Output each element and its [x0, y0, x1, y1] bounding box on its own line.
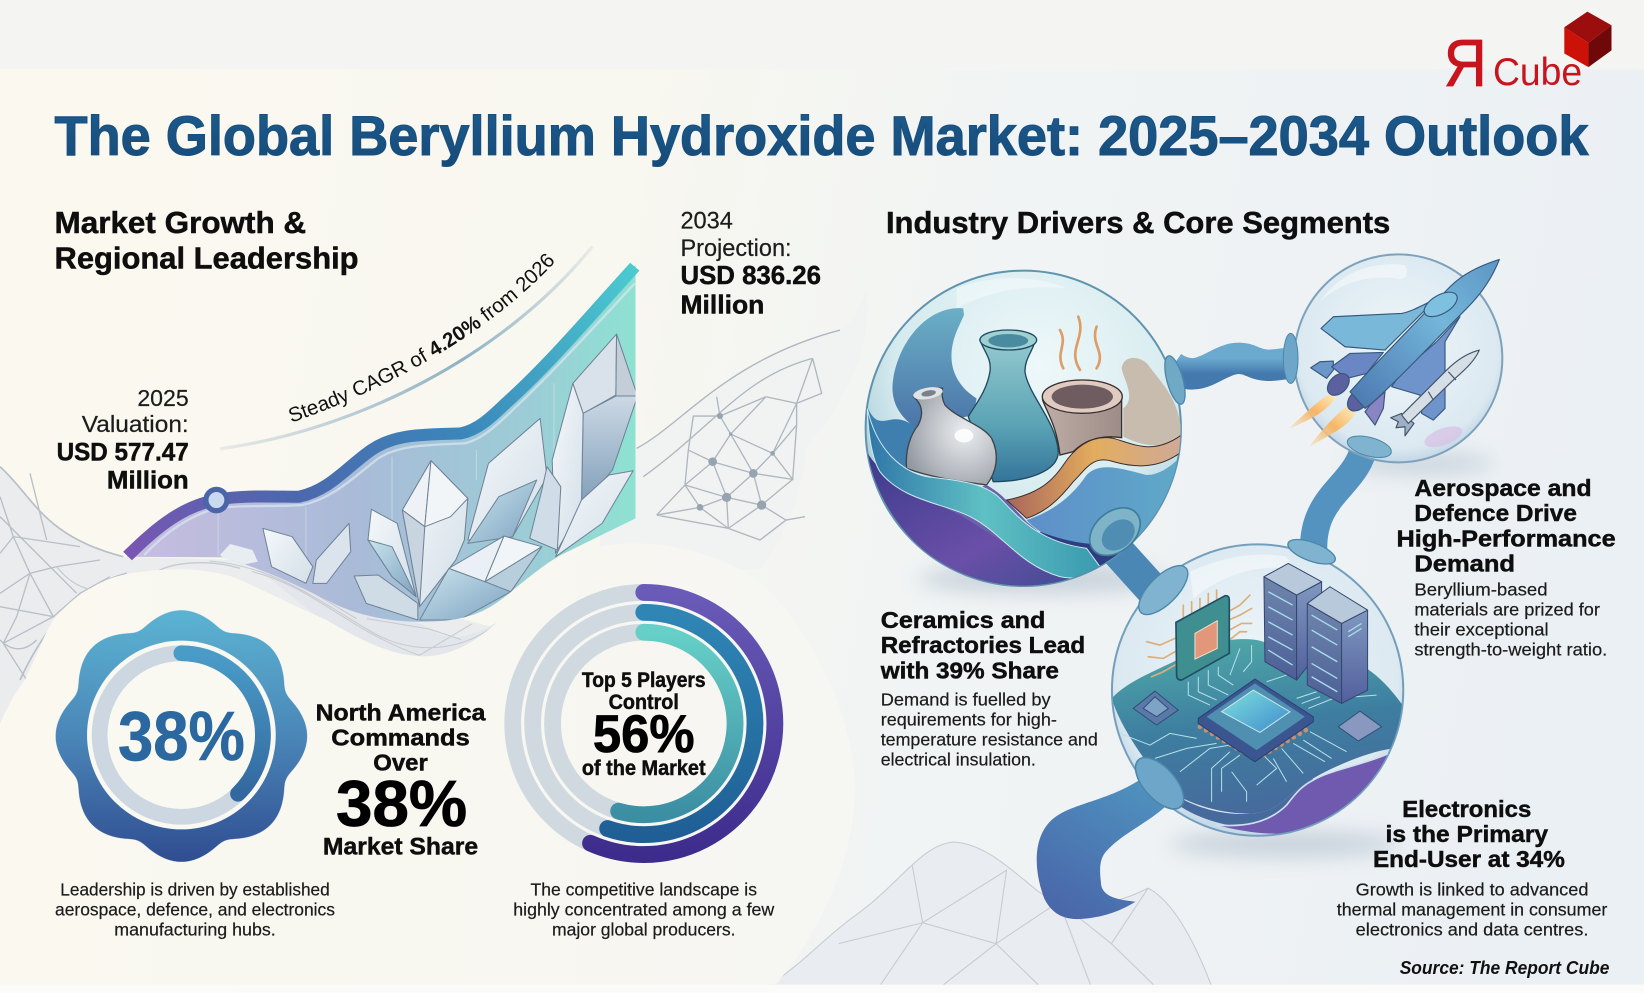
2025 marker: [203, 487, 230, 513]
2025 valuation label: 2025: [137, 385, 189, 411]
2025 valuation label: [57, 385, 189, 495]
north america description: Leadership is driven by established: [60, 879, 330, 899]
text: ceramics: with 39% Share: [880, 657, 1059, 683]
text: electronics: electronics and data centres.: [1356, 919, 1588, 939]
line chart with crystals: [127, 265, 638, 622]
sphere shadows: [917, 454, 1494, 857]
back swoosh: [892, 308, 977, 428]
north america stat: Market Share: [323, 834, 478, 861]
text: ceramics: electrical insulation.: [881, 749, 1036, 769]
text: aerospace: their exceptional: [1414, 619, 1549, 639]
2025 valuation label: Valuation:: [82, 411, 189, 437]
chip: copper: [1176, 596, 1229, 680]
2025 valuation label: USD 577.47: [57, 438, 189, 466]
ring chart: top 5 players: 56%: [593, 706, 695, 764]
sphere: aerospace: [1283, 254, 1502, 462]
text: aerospace: Beryllium-based: [1414, 580, 1548, 600]
text: aerospace: High-Performance: [1397, 525, 1616, 551]
sphere: ceramics: [866, 271, 1189, 587]
flames: [1289, 392, 1355, 447]
text: aerospace: Demand: [1414, 550, 1515, 576]
title: The Global Beryllium Hydroxide Market: 2025–2034 Outlook: [55, 105, 1589, 167]
gold legs: [1147, 590, 1252, 677]
mesh wave right: [600, 290, 867, 570]
pipe flange: [1080, 354, 1189, 565]
tube: [1042, 380, 1122, 455]
text: aerospace: strength-to-weight ratio.: [1414, 639, 1607, 659]
source note: Source: The Report Cube: [1400, 957, 1609, 978]
heat swirls: [1060, 317, 1100, 370]
north america description: aerospace, defence, and electronics: [55, 899, 335, 919]
circuit board: [1112, 639, 1405, 814]
tail pipe: [1037, 749, 1192, 919]
north america stat: North America: [316, 699, 486, 725]
missile: [1391, 350, 1479, 436]
servers: [1264, 563, 1368, 703]
ring chart: top 5 players: [513, 592, 775, 855]
text: ceramics: Refractories Lead: [881, 632, 1085, 658]
north america description: [55, 879, 335, 939]
text: electronics: [1337, 796, 1608, 939]
logo: [1444, 12, 1611, 101]
text: electronics: Electronics: [1402, 796, 1531, 822]
text: aerospace: [1397, 475, 1616, 659]
text: electronics: thermal management in consumer: [1337, 899, 1608, 919]
heading: market growth: [55, 206, 359, 275]
heading: industry drivers: Industry Drivers & Core Segments: [886, 206, 1390, 240]
text: ceramics: Ceramics and: [881, 607, 1045, 633]
north america stat: Over: [373, 750, 428, 776]
traces: [1120, 645, 1377, 802]
competitive description: major global producers.: [552, 919, 736, 939]
competitive description: [513, 879, 775, 939]
badge: 38%: 38%: [118, 697, 245, 775]
text: ceramics: [880, 607, 1098, 769]
text: ceramics: temperature resistance and: [881, 730, 1098, 750]
badge: 38%: [56, 610, 307, 862]
2034 projection label: Million: [680, 290, 764, 320]
north america stat: Commands: [331, 725, 470, 751]
CAGR arc line: [220, 246, 592, 449]
north america stat: 38%: [336, 767, 467, 840]
crystals: [220, 334, 638, 620]
vase: grey: [906, 385, 996, 485]
heading: market growth: Market Growth &: [55, 206, 306, 240]
small chips: [1133, 691, 1382, 741]
vase: teal: [968, 330, 1058, 482]
cream lower panel: [0, 543, 855, 985]
2034 projection label: [680, 208, 821, 320]
2034 projection label: 2034: [680, 208, 733, 235]
2034 projection label: Projection:: [680, 235, 792, 262]
pipe flanges: [1131, 534, 1338, 622]
ring chart: top 5 players: Top 5 Players: [582, 669, 706, 692]
main chip: [1198, 679, 1313, 762]
text: aerospace: Defence Drive: [1414, 500, 1577, 526]
mesh wave centre: [210, 545, 587, 671]
text: ceramics: requirements for high-: [881, 710, 1057, 730]
text: electronics: is the Primary: [1386, 821, 1548, 847]
CAGR label: Steady CAGR of 4.20% from 2026: [289, 254, 554, 422]
sphere: electronics: [1112, 534, 1405, 836]
text: electronics: End-User at 34%: [1373, 846, 1565, 872]
mesh wave left: [0, 467, 667, 807]
growth line: [128, 267, 635, 556]
ring chart: top 5 players: of the Market: [582, 757, 706, 780]
heading: market growth: Regional Leadership: [55, 241, 359, 275]
mesh wave bottom right: [771, 842, 1211, 985]
pipes: [1101, 358, 1365, 608]
text: aerospace: materials are prized for: [1414, 600, 1600, 620]
logo: Cube: [1493, 51, 1582, 94]
north america stat: [316, 699, 486, 861]
text: ceramics: Demand is fuelled by: [881, 690, 1051, 710]
text: aerospace: Aerospace and: [1414, 475, 1592, 501]
competitive description: highly concentrated among a few: [513, 899, 775, 919]
ring chart: top 5 players: Control: [609, 691, 679, 714]
2034 projection label: USD 836.26: [680, 260, 821, 290]
logo: Я: [1444, 26, 1487, 101]
2025 valuation label: Million: [107, 467, 189, 495]
text: electronics: Growth is linked to advanced: [1356, 879, 1588, 899]
competitive description: The competitive landscape is: [531, 879, 757, 899]
north america description: manufacturing hubs.: [114, 919, 276, 939]
jet: [1311, 259, 1499, 425]
